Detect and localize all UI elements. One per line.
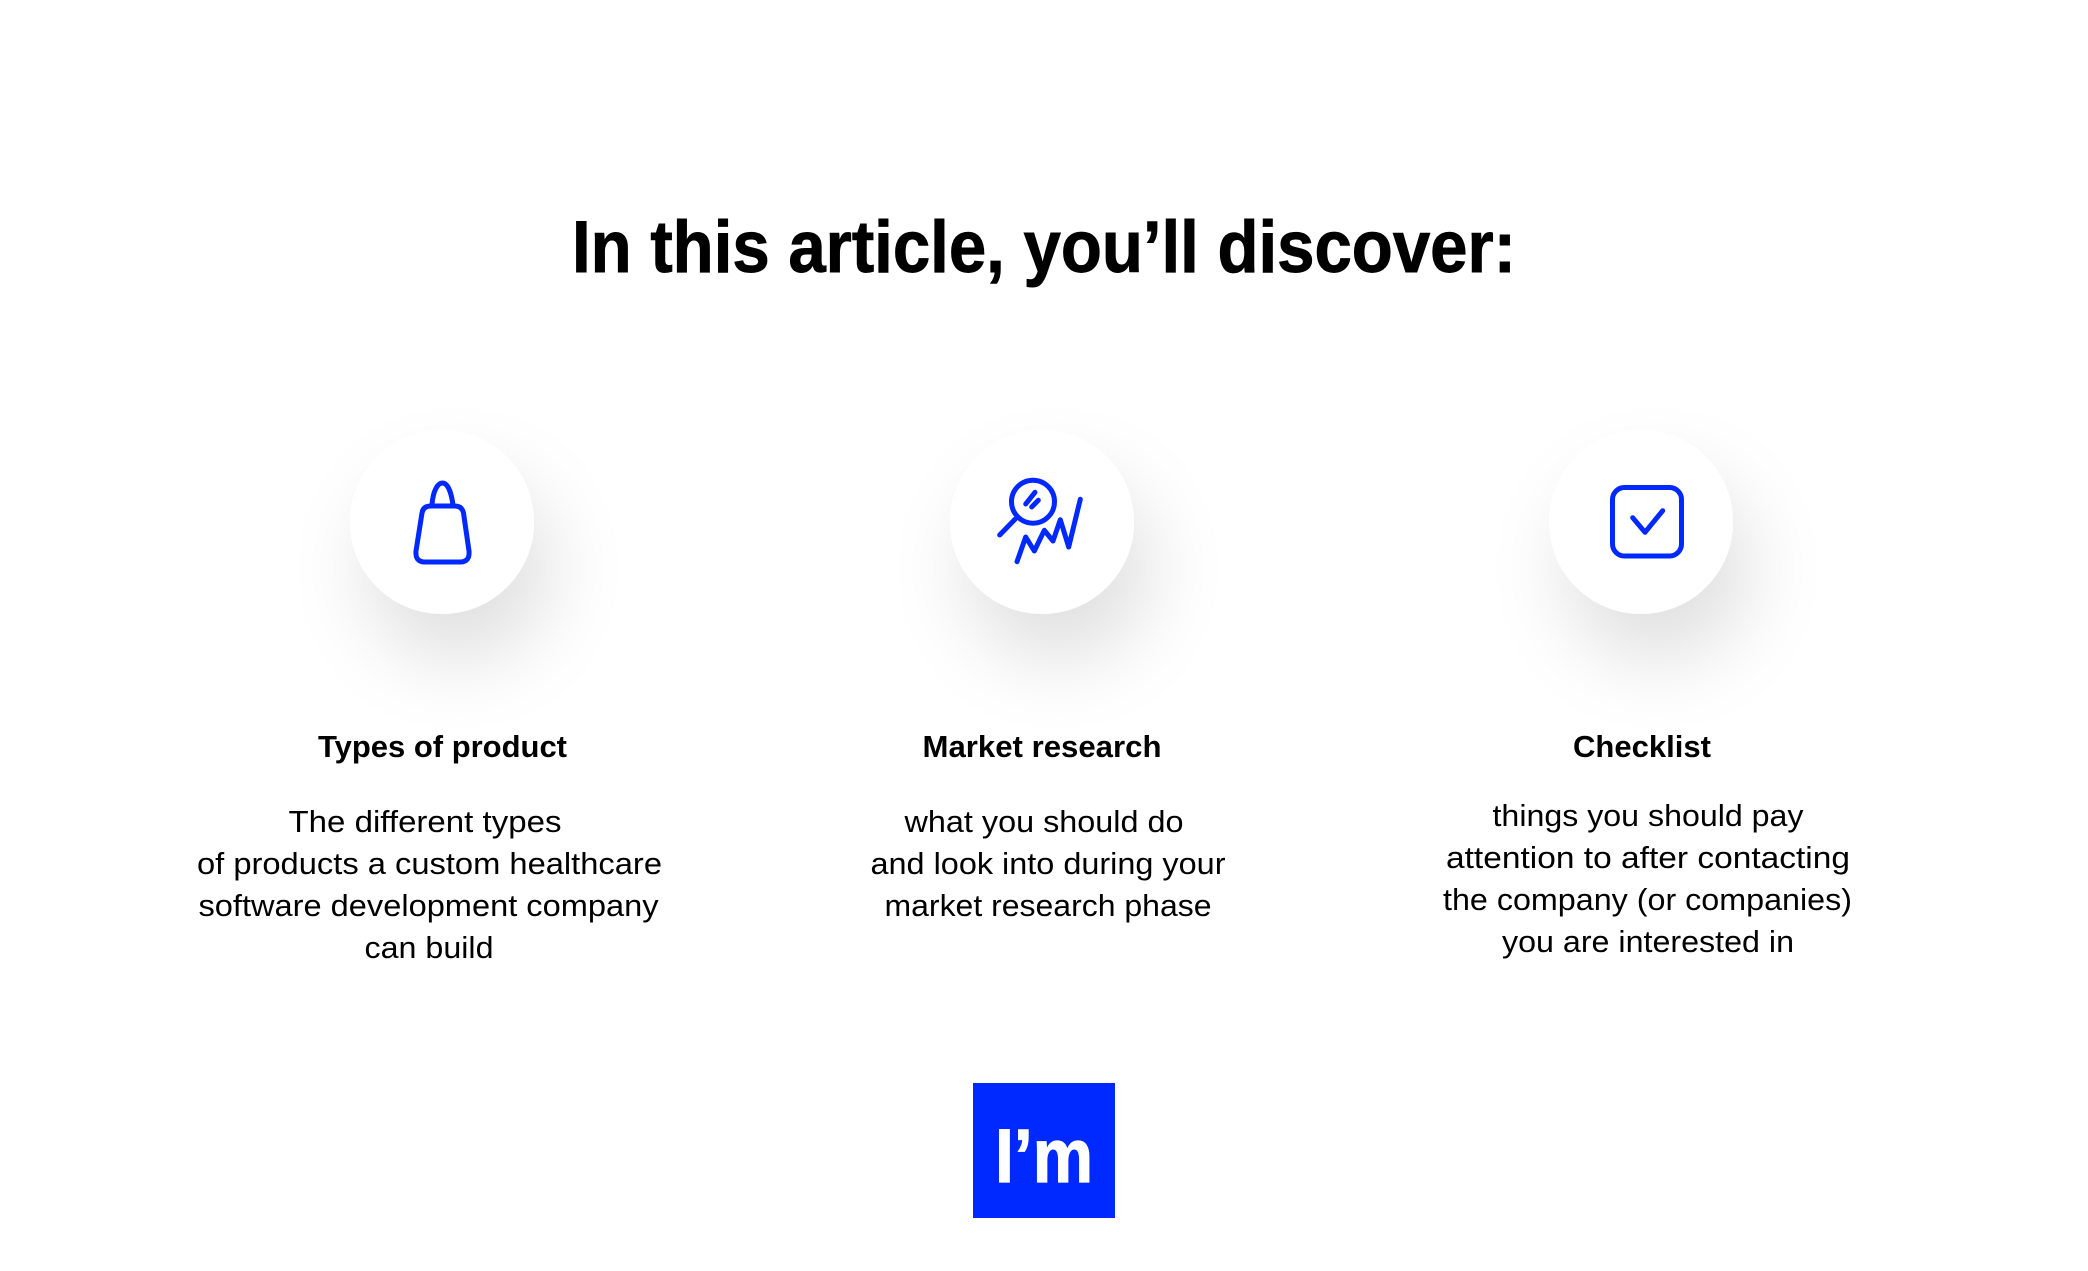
heading: types of product: Types of product xyxy=(318,729,567,764)
text block: checklist description xyxy=(1443,798,1852,959)
text block: checklist description: the company (or companies) xyxy=(1443,882,1852,917)
heading: checklist: Checklist xyxy=(1573,729,1711,764)
text block: types of product description xyxy=(197,804,662,965)
panel: market research xyxy=(870,430,1226,923)
panel: checklist xyxy=(1443,430,1852,959)
text block: checklist description: attention to after contacting xyxy=(1446,840,1850,875)
text block: market research description: market research phase xyxy=(884,888,1212,923)
text block: types of product description: The different types xyxy=(288,804,562,839)
text block: market research description: what you should do xyxy=(903,804,1184,839)
text block: types of product description: can build xyxy=(364,930,494,965)
panel: types of product xyxy=(197,430,662,965)
text block: market research description xyxy=(870,804,1226,923)
icon: shopping bag in circle xyxy=(350,430,534,614)
logo: I’m xyxy=(995,1114,1093,1199)
logo xyxy=(973,1083,1115,1218)
heading: market research: Market research xyxy=(922,729,1162,764)
text block: types of product description: software development company xyxy=(198,888,659,923)
title: In this article, you’ll discover: xyxy=(572,207,1516,288)
icon: magnifier over chart in circle xyxy=(950,430,1134,614)
text block: checklist description: things you should pay xyxy=(1492,798,1804,833)
icon: checkbox in circle xyxy=(1549,430,1733,614)
text block: checklist description: you are interested in xyxy=(1502,924,1794,959)
text block: market research description: and look into during your xyxy=(870,846,1226,881)
text block: types of product description: of products a custom healthcare xyxy=(197,846,662,881)
